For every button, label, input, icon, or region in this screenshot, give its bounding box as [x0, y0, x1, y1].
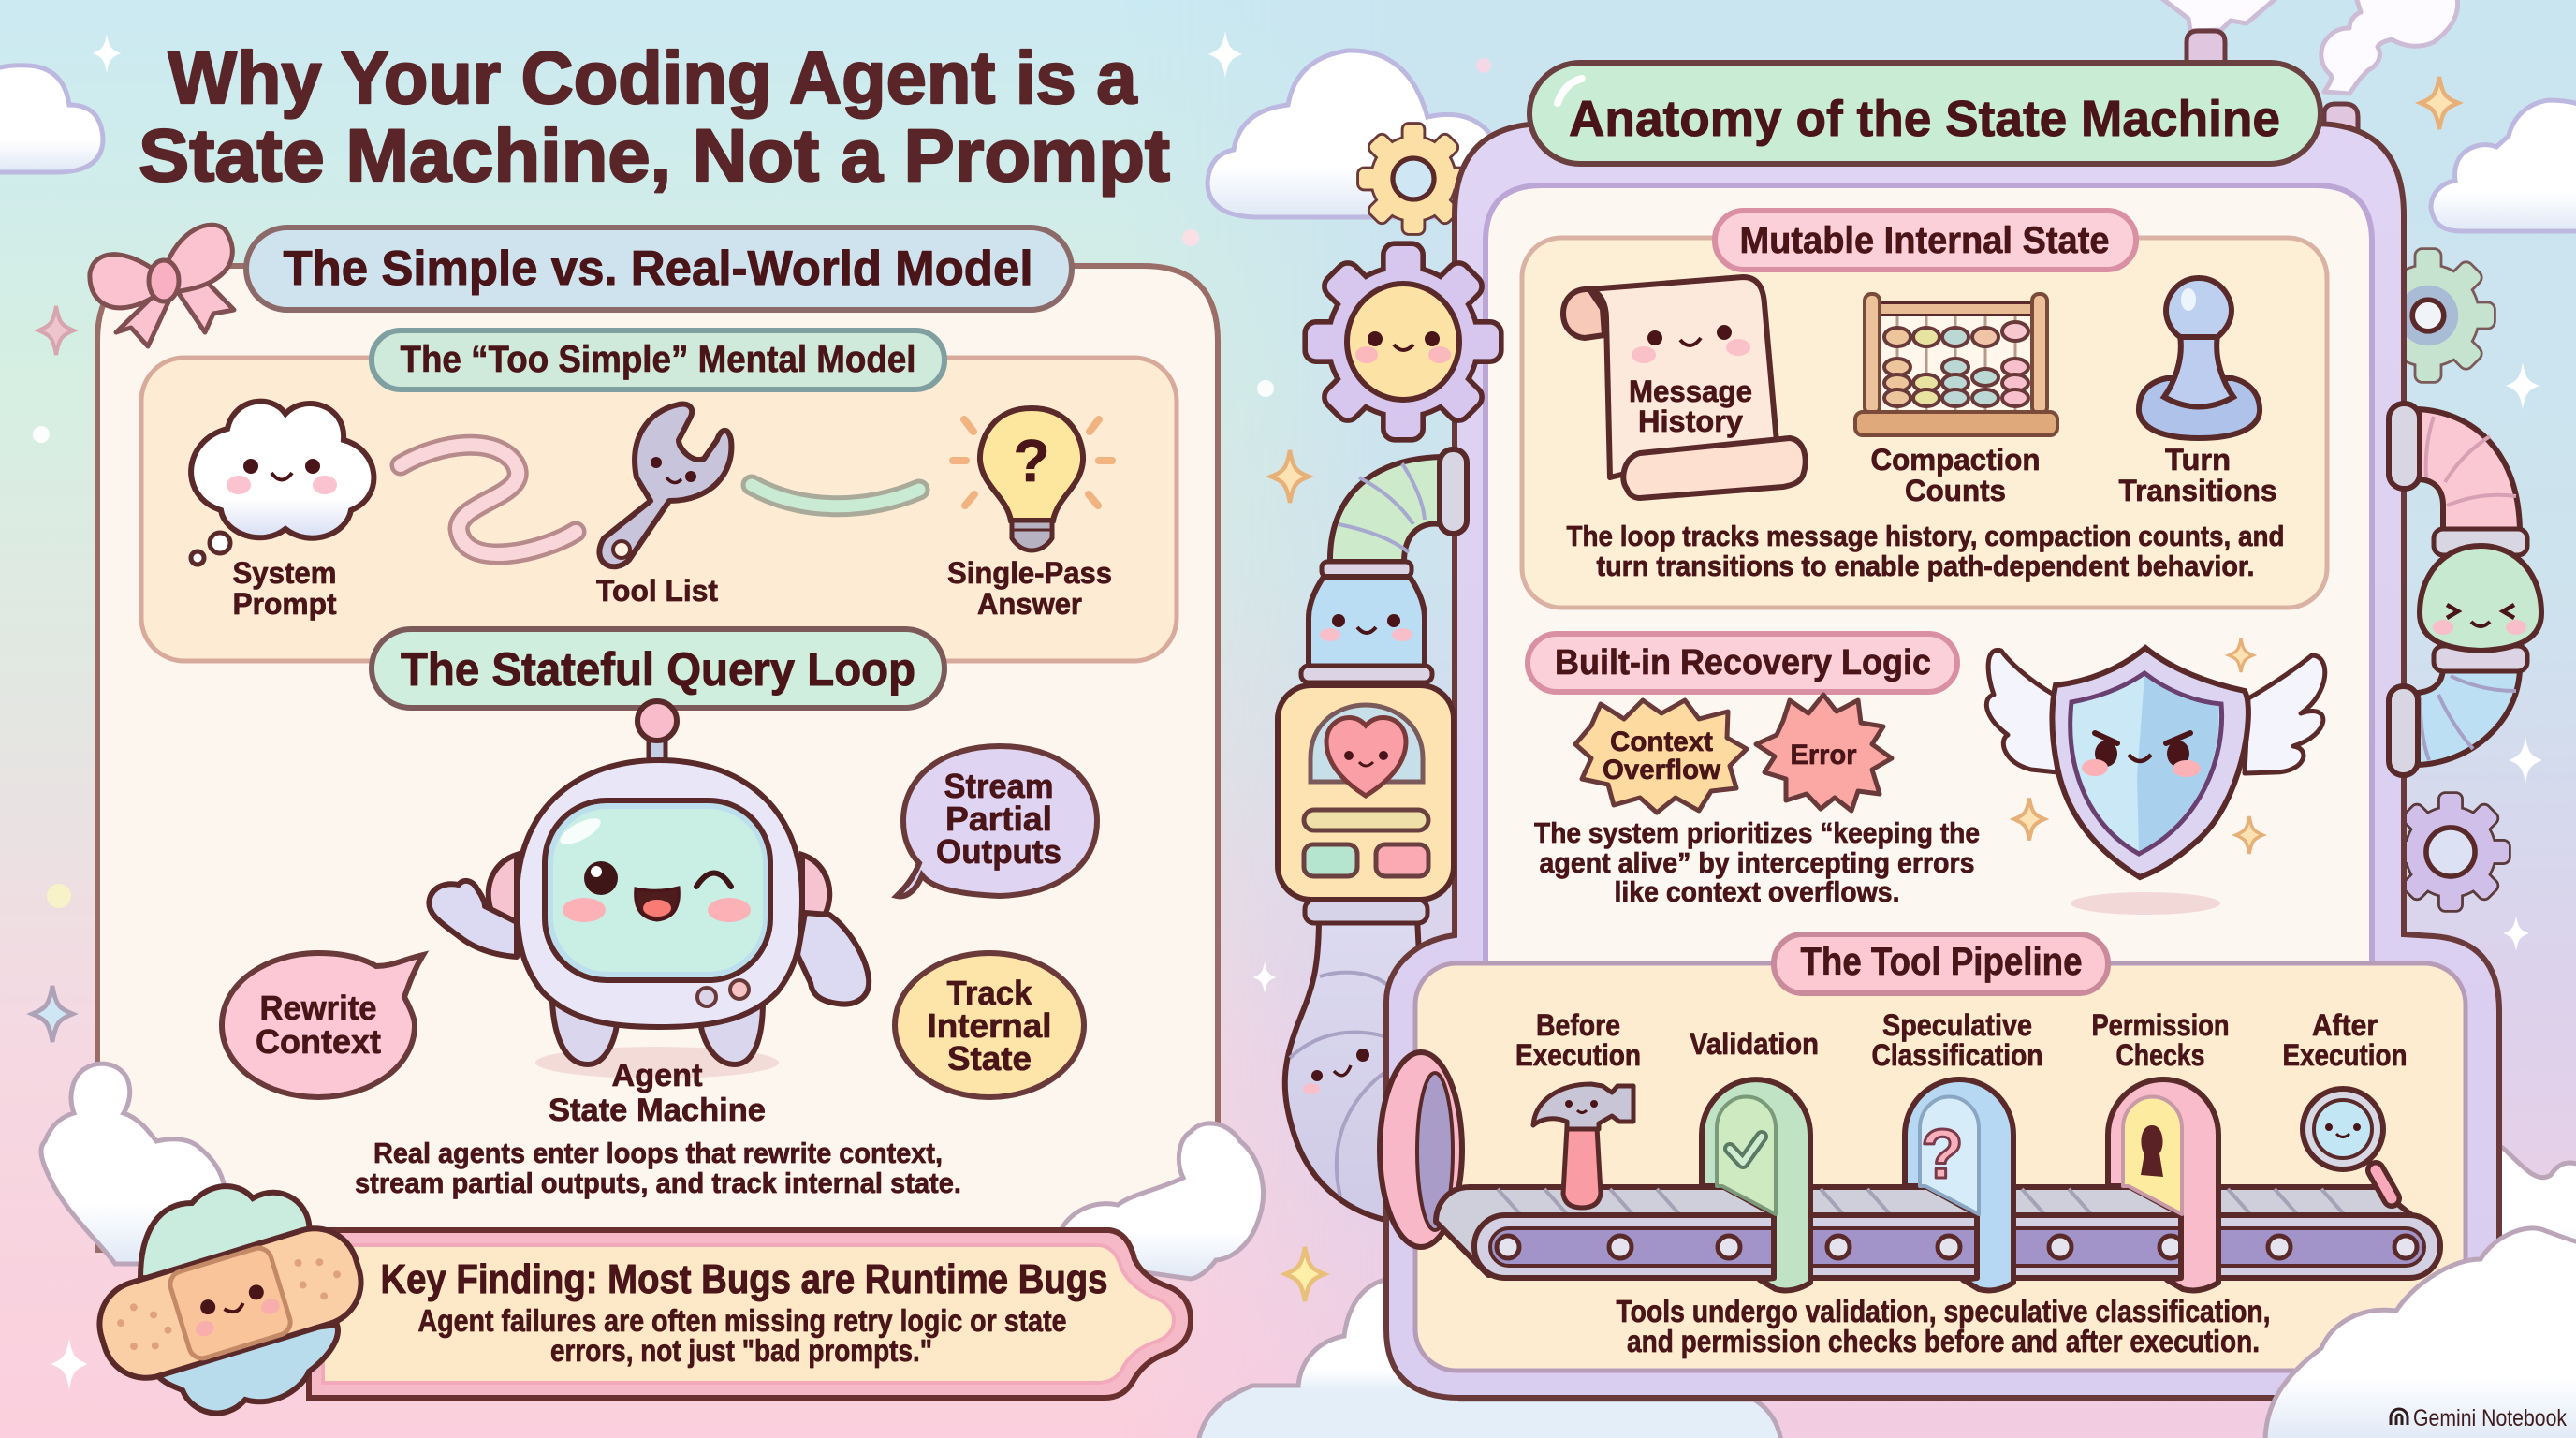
stage labels: Execution [2282, 1038, 2408, 1072]
icon: bandage on jelly [89, 1186, 372, 1413]
caption: tools undergo: Tools undergo validation, speculative classification, [1616, 1294, 2271, 1328]
stage labels: Validation [1690, 1027, 1819, 1061]
starburst: context overflow [1575, 700, 1747, 813]
stage labels: Speculative [1882, 1008, 2032, 1042]
back sparkle: yellow [1285, 1247, 1325, 1301]
icon: right pink elbow pipe [2389, 404, 2520, 534]
bubble: rewrite context: Rewrite [260, 989, 376, 1027]
stage labels: Permission [2091, 1008, 2230, 1042]
banner: key finding [309, 1230, 1191, 1398]
heading: anatomy of the state machine [1530, 63, 2320, 164]
bubble: track internal state: Track [947, 974, 1032, 1012]
caption: real agents: stream partial outputs, and track internal state. [355, 1167, 961, 1199]
stage labels: Classification [1872, 1038, 2042, 1072]
label: single-pass answer: Single-Pass [947, 556, 1112, 590]
icon: blue jar with face [1301, 577, 1432, 682]
label: message history: History [1638, 404, 1743, 438]
panel: mutable internal state [1522, 211, 2327, 608]
decorative clouds top [0, 51, 2576, 231]
back clouds bottom [1198, 1142, 2576, 1438]
gear: purple right lower [2393, 794, 2509, 910]
starburst: context overflow: Context [1610, 726, 1713, 757]
heading: too simple mental model [372, 330, 944, 389]
caption: keeping alive: The system prioritizes “keeping the [1534, 816, 1980, 849]
label: agent state machine [549, 1058, 766, 1128]
stage labels: Execution [1515, 1038, 1641, 1072]
heading: stateful query loop [372, 629, 944, 708]
stage labels: Checks [2115, 1038, 2205, 1072]
icon: yellow control device [1278, 685, 1454, 900]
bubble: stream partial outputs: Outputs [936, 832, 1061, 871]
caption: keeping alive [1534, 816, 1980, 908]
icon: wrench [599, 404, 731, 566]
icon: pink bow [90, 225, 234, 346]
icon: message history scroll [1563, 277, 1806, 498]
pink ring entrance [1380, 1052, 1462, 1247]
heading: recovery [1528, 634, 1957, 692]
gate: speculative classification [1905, 1079, 2013, 1290]
label: agent state machine: State Machine [549, 1093, 766, 1128]
icon: magnifier [2303, 1089, 2392, 1198]
chimney and smoke [2160, 0, 2458, 131]
icon: turn transitions pawn [2139, 278, 2260, 438]
panel: machine body [1386, 124, 2499, 1398]
label: turn transitions: Turn [2165, 443, 2231, 477]
gate: validation [1702, 1079, 1810, 1290]
bubble: stream partial outputs: Stream [944, 767, 1054, 805]
starburst: error [1756, 695, 1892, 811]
panel: tool pipeline [1380, 934, 2466, 1371]
title: State Machine, Not a Prompt [139, 113, 1170, 197]
icon: right blue pipe [2389, 667, 2520, 775]
stage labels: Before [1536, 1008, 1620, 1042]
caption: keeping alive: agent alive” by intercepting errors [1539, 846, 1975, 879]
caption: tools undergo: and permission checks before and after execution. [1627, 1324, 2260, 1358]
bubble: stream partial outputs [897, 746, 1097, 896]
icon: purple gear with sun face [1308, 246, 1499, 437]
decorative clouds around banner [41, 1064, 1264, 1279]
label: system prompt [232, 556, 337, 621]
panel: simple vs real-world model [97, 266, 1218, 1250]
label: agent state machine: Agent [612, 1058, 702, 1093]
label: tool list: Tool List [596, 574, 718, 608]
gear: orange small [1359, 125, 1468, 233]
heading: anatomy of the state machine: Anatomy of the State Machine [1569, 91, 2280, 147]
icon: lightbulb with question mark: ? [1013, 427, 1050, 494]
heading: recovery: Built-in Recovery Logic [1555, 643, 1931, 682]
label: single-pass answer: Answer [977, 587, 1082, 621]
bubble: stream partial outputs: Partial [945, 800, 1052, 838]
bubble: track internal state: State [947, 1039, 1032, 1078]
label: compaction counts: Counts [1905, 474, 2006, 507]
icon: abacus [1855, 294, 2057, 435]
label: compaction counts [1870, 443, 2041, 507]
gate: permission checks [2108, 1079, 2218, 1290]
gear: green right [2363, 250, 2494, 381]
arrow: pink wavy path [401, 445, 576, 554]
label: message history: Message [1629, 374, 1752, 408]
caption: keeping alive: like context overflows. [1614, 875, 1900, 908]
banner: key finding: errors, not just "bad prompts." [550, 1333, 932, 1368]
robot: agent state machine [429, 701, 869, 1078]
icon: system prompt cloud [191, 402, 373, 565]
bubble: rewrite context: Context [256, 1022, 381, 1061]
banner: key finding: Key Finding: Most Bugs are Runtime Bugs [380, 1256, 1108, 1302]
icon: winged shield [1986, 638, 2325, 915]
heading: too simple mental model: The “Too Simple” Mental Model [401, 339, 915, 380]
conveyor belt [1436, 1187, 2440, 1278]
label: system prompt: Prompt [232, 587, 337, 621]
label: system prompt: System [232, 556, 337, 590]
caption: real agents: Real agents enter loops that rewrite context, [373, 1137, 943, 1169]
starburst: context overflow: Overflow [1603, 755, 1721, 785]
heading: mutable internal state [1715, 211, 2136, 270]
front cloud bottom right [2265, 1228, 2576, 1438]
caption: tools undergo [1616, 1294, 2271, 1358]
label: single-pass answer [947, 556, 1112, 621]
heading: simple vs real-world model [246, 227, 1072, 310]
label: turn transitions [2119, 443, 2276, 507]
heading: mutable internal state: Mutable Internal State [1739, 220, 2110, 261]
stage labels [1515, 1008, 2408, 1072]
starburst: error: Error [1790, 740, 1857, 770]
bubble: rewrite context [222, 953, 423, 1097]
arrow: green path [752, 485, 919, 506]
banner: key finding: Agent failures are often missing retry logic or state [417, 1303, 1067, 1338]
label: message history [1629, 374, 1752, 438]
icon: lavender pipe with face [1285, 900, 1427, 1220]
bubble: track internal state: Internal [927, 1006, 1052, 1045]
icon: green jar with face [2420, 529, 2541, 671]
heading: tool pipeline [1774, 934, 2108, 993]
icon: hammer [1533, 1084, 1633, 1208]
title [139, 36, 1170, 197]
icon: left green elbow pipe [1322, 449, 1467, 577]
label: compaction counts: Compaction [1870, 443, 2041, 477]
gate: speculative classification: ? [1921, 1115, 1964, 1193]
bubble: track internal state [895, 953, 1084, 1097]
panel: built-in recovery logic [1528, 634, 2325, 915]
heading: tool pipeline: The Tool Pipeline [1801, 939, 2082, 983]
heading: simple vs real-world model: The Simple vs. Real-World Model [283, 242, 1033, 296]
label: turn transitions: Transitions [2119, 474, 2276, 507]
sub-panel: too simple model [141, 330, 1177, 661]
icon: lightbulb with question mark [953, 408, 1112, 550]
caption: loop tracks [1567, 520, 2284, 582]
stage labels: After [2312, 1008, 2378, 1042]
title: Why Your Coding Agent is a [168, 36, 1138, 119]
caption: loop tracks: The loop tracks message history, compaction counts, and [1567, 520, 2284, 552]
caption: real agents [355, 1137, 961, 1199]
caption: loop tracks: turn transitions to enable path-dependent behavior. [1597, 550, 2254, 582]
heading: stateful query loop: The Stateful Query Loop [401, 643, 915, 696]
